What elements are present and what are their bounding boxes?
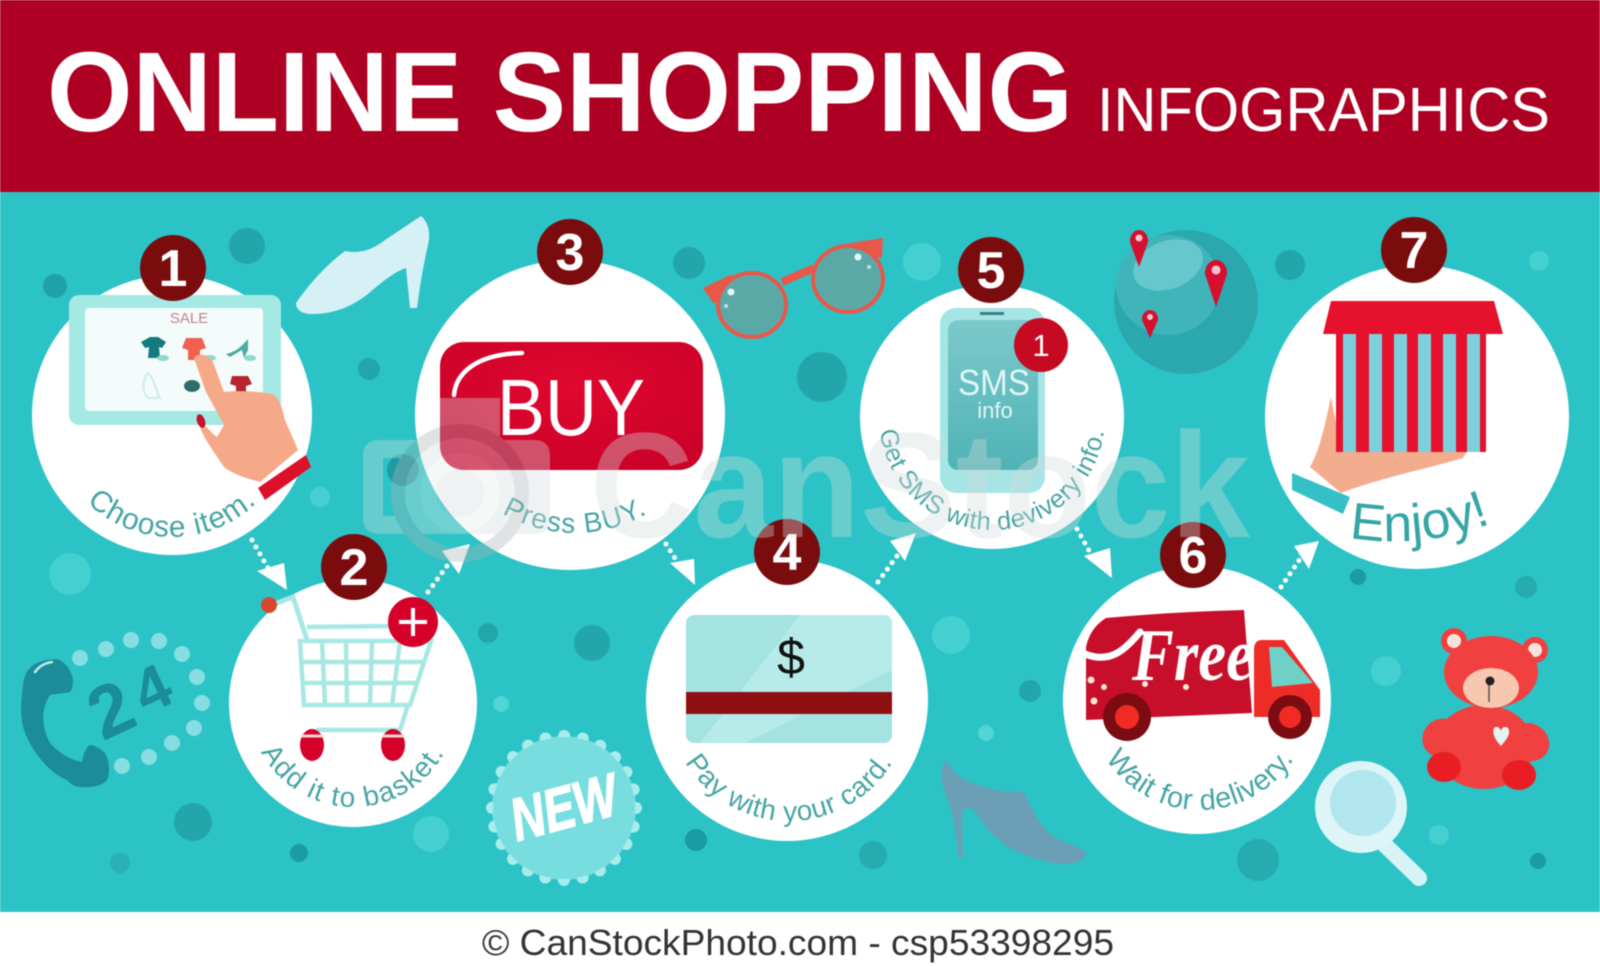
step number 2: 2 (340, 539, 368, 597)
decoration: sunglasses (703, 238, 883, 337)
arrow: step 1 to 2 (252, 540, 287, 590)
step label: Add it to basket. (260, 748, 444, 808)
step label: Pay with your card. (686, 752, 892, 828)
decoration: globe with map pins (1114, 230, 1258, 374)
step number 3 (537, 219, 603, 285)
subtitle: INFOGRAPHICS (1097, 76, 1550, 145)
step number 2 (321, 534, 387, 600)
icon: tablet with shop items (69, 295, 281, 425)
step number 7 (1381, 217, 1447, 283)
arrow: step 2 to 3 (428, 544, 470, 592)
step number 6: 6 (1179, 527, 1207, 585)
step number 1 (140, 235, 206, 301)
decoration: 24h phone: 4 (122, 651, 183, 728)
panel: step 1 choose item (31, 234, 313, 556)
icon: delivery truck: Free (1131, 615, 1254, 697)
decoration: glass slipper (296, 216, 429, 314)
decoration: 24h phone: 2 (75, 663, 147, 756)
step number 6 (1160, 522, 1226, 588)
icon: delivery truck (1085, 610, 1320, 741)
step label: Press BUY. (504, 496, 646, 534)
icon: tablet with shop items: SALE (170, 310, 208, 327)
step number 5 (958, 237, 1024, 303)
icon: buy button: BUY (497, 363, 645, 452)
badge: plus (388, 597, 438, 647)
icon: smartphone with SMS (940, 308, 1068, 493)
panel: step 3 press buy (414, 218, 726, 571)
icon: pointing hand with red bracelet (194, 355, 311, 500)
step number 4: 4 (773, 524, 802, 582)
step label: Get SMS with devivery info. (880, 429, 1104, 531)
teal background panel (0, 192, 1600, 912)
arrow: step 5 to 6 (1077, 529, 1112, 578)
step number 4 (754, 519, 820, 585)
panel: step 4 pay with card (645, 518, 929, 842)
arrow: step 4 to 5 (878, 533, 916, 582)
badge: 1 notification: 1 (1032, 328, 1050, 363)
decoration: teddy bear (1415, 628, 1557, 790)
decoration: NEW badge (492, 736, 636, 880)
decoration: blue slipper (941, 760, 1087, 864)
icon: buy button (440, 342, 703, 470)
footer credit: © CanStockPhoto.com - csp53398295 (482, 922, 1114, 963)
icon: credit card (686, 615, 892, 743)
step label: Wait for delivery. (1108, 746, 1293, 811)
step number 7: 7 (1400, 222, 1428, 280)
icon: smartphone with SMS: info (977, 398, 1013, 423)
icon: hand holding gift box (1292, 301, 1503, 514)
panel: step 5 get SMS (859, 236, 1125, 550)
step number 1: 1 (159, 240, 187, 298)
badge: 1 notification (1014, 318, 1068, 372)
watermark: CanStock (590, 401, 1251, 569)
step label: Enjoy! (1352, 490, 1488, 552)
arrow: step 3 to 4 (666, 544, 695, 585)
arrow: step 6 to 7 (1281, 541, 1319, 587)
panel: step 6 wait for delivery (1062, 521, 1332, 835)
title: ONLINE SHOPPING (47, 29, 1073, 155)
icon: smartphone with SMS: SMS (958, 362, 1030, 403)
panel: step 2 add to basket (228, 533, 478, 828)
step label: Choose item. (90, 490, 255, 538)
decoration: NEW badge: NEW (503, 760, 628, 854)
decoration: magnifying glass (1315, 761, 1419, 878)
step number 5: 5 (977, 242, 1005, 300)
icon: shopping cart (261, 597, 438, 761)
panel: step 7 enjoy (1264, 216, 1570, 570)
icon: credit card: $ (777, 629, 805, 685)
step number 3: 3 (556, 224, 584, 282)
decoration: 24h phone (21, 632, 210, 787)
header band (0, 0, 1600, 192)
